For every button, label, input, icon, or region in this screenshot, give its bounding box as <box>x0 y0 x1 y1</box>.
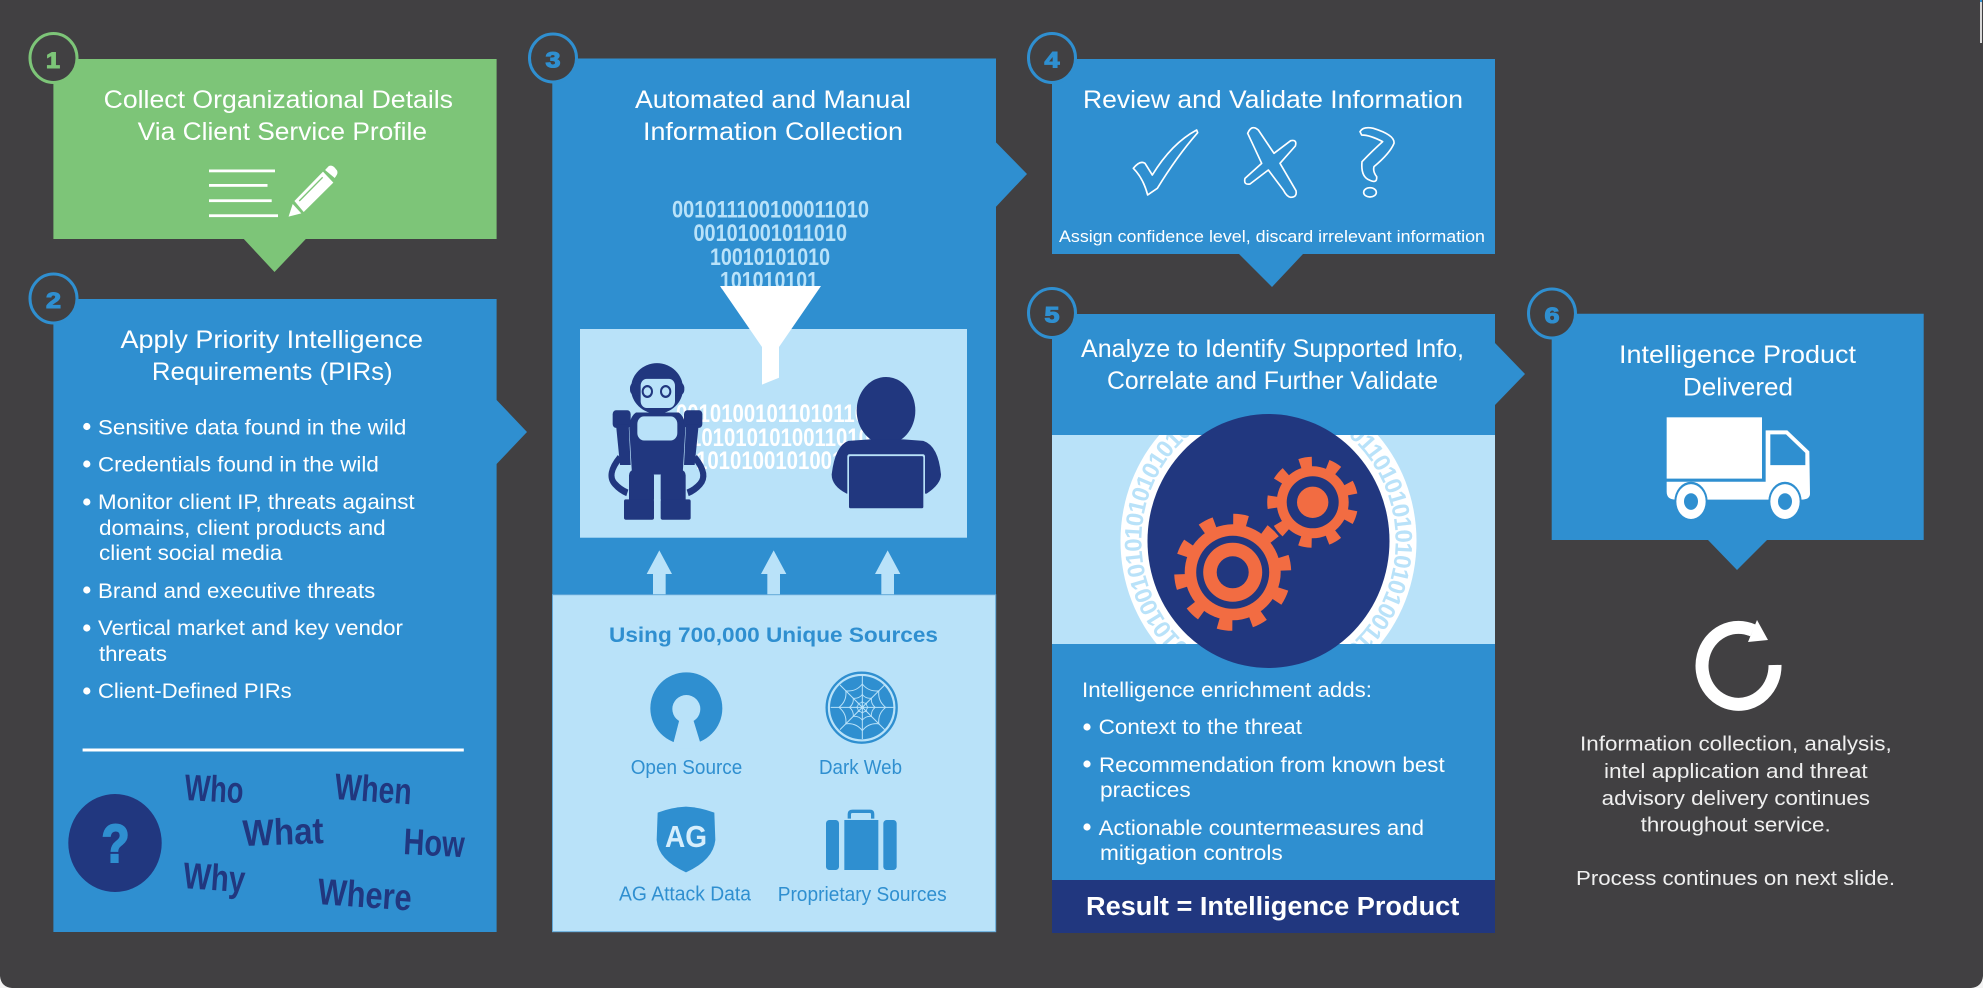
question words: Where <box>316 871 413 919</box>
panel: step 6 delivered <box>1528 289 1924 890</box>
panel 1 background with down arrow <box>53 59 497 272</box>
step 3 badge <box>530 34 576 82</box>
bullet list of PIRs <box>83 416 415 703</box>
enrichment list: Context to the threat <box>1099 716 1302 739</box>
arrows: data flowing up from sources <box>647 550 900 595</box>
incoming binary data: 10010101010 <box>710 244 830 271</box>
heading <box>635 86 911 146</box>
heading: Information Collection <box>643 118 903 146</box>
heading: Analyze to Identify Supported Info, <box>1081 335 1464 363</box>
filtered binary data <box>676 400 870 475</box>
incoming binary data: 001011100100011010 <box>672 196 869 223</box>
question words: What <box>242 810 324 854</box>
step 1 badge <box>30 34 77 82</box>
source: open source <box>631 672 742 779</box>
heading <box>1619 341 1856 402</box>
icon: question mark circle <box>68 794 162 892</box>
source: AG attack data <box>619 807 752 906</box>
source: AG attack data: AG <box>665 819 707 854</box>
heading: Apply Priority Intelligence <box>120 326 423 354</box>
icon: question mark circle: ? <box>102 814 130 874</box>
step 6 badge <box>1528 289 1576 338</box>
bullet list of PIRs: domains, client products and <box>99 517 386 540</box>
bullet list of PIRs: Monitor client IP, threats against <box>98 491 415 514</box>
panel: step 5 analyze <box>1027 287 1525 933</box>
sources section background <box>552 595 996 932</box>
source: open source: Open Source <box>631 757 742 779</box>
result bar <box>1052 880 1495 933</box>
icon: gears on navy circle <box>1148 414 1390 668</box>
sources heading: Using 700,000 Unique Sources <box>609 623 938 647</box>
icon: funnel <box>720 286 821 385</box>
continuation note: Process continues on next slide. <box>1576 867 1895 890</box>
bullet list of PIRs: Brand and executive threats <box>98 580 375 603</box>
bullet list of PIRs: Vertical market and key vendor <box>98 617 403 640</box>
heading: Correlate and Further Validate <box>1107 367 1438 395</box>
continuation note: advisory delivery continues <box>1602 787 1870 810</box>
step 5 badge: 5 <box>1044 302 1060 328</box>
step 4 badge: 4 <box>1044 48 1060 72</box>
icons: check, cross, question <box>1133 128 1394 197</box>
panel 3 blue background with right arrow <box>552 58 1027 595</box>
bullet list of PIRs: Sensitive data found in the wild <box>98 416 406 439</box>
source: dark web <box>819 673 902 779</box>
step 1 badge: 1 <box>46 48 60 73</box>
source: proprietary sources: Proprietary Sources <box>778 884 947 906</box>
step 4 badge <box>1028 34 1076 82</box>
incoming binary data: 101010101 <box>720 268 818 295</box>
continuation note: Information collection, analysis, <box>1580 733 1892 756</box>
enrichment list: Recommendation from known best <box>1099 754 1445 777</box>
step 6 badge: 6 <box>1544 303 1560 328</box>
heading: Collect Organizational Details <box>104 86 453 114</box>
icon: delivery truck <box>1667 417 1810 521</box>
question words: Why <box>182 855 247 900</box>
incoming binary data: 00101001011010 <box>694 220 847 247</box>
enrichment list: practices <box>1100 779 1191 802</box>
icon: document lines and pencil <box>209 166 337 217</box>
heading <box>120 326 423 386</box>
bullet list of PIRs: Client-Defined PIRs <box>98 680 292 703</box>
panel 5 background with right arrow <box>1052 314 1525 933</box>
enrichment list: Actionable countermeasures and <box>1099 817 1424 840</box>
heading: Requirements (PIRs) <box>152 358 393 386</box>
incoming binary data <box>672 196 869 295</box>
heading <box>104 86 453 146</box>
enrichment list: Intelligence enrichment adds: <box>1082 679 1372 702</box>
step 3 badge: 3 <box>546 48 560 72</box>
step 2 badge <box>30 274 77 323</box>
enrichment list <box>1082 679 1445 865</box>
continuation note <box>1576 733 1895 890</box>
bullet list of PIRs: client social media <box>99 542 283 565</box>
continuation note: throughout service. <box>1641 814 1831 837</box>
question words <box>182 766 466 919</box>
source: proprietary sources <box>778 811 947 906</box>
panel: step 2 priority intelligence requirements <box>30 274 527 932</box>
panel: step 3 automated and manual collection <box>530 34 1027 932</box>
icon: robot <box>611 363 703 520</box>
heading <box>1081 335 1464 395</box>
caption: Assign confidence level, discard irrelevant information <box>1059 227 1485 246</box>
step 2 badge: 2 <box>46 288 61 313</box>
question words: Who <box>184 767 245 811</box>
filtered binary data: 101010010100101 <box>696 447 866 475</box>
icon: refresh cycle <box>1702 620 1775 704</box>
bullet list of PIRs: Credentials found in the wild <box>98 454 379 477</box>
question words: How <box>403 821 466 865</box>
question words: When <box>333 766 413 812</box>
result bar: Result = Intelligence Product <box>1086 893 1460 921</box>
binary ring <box>1120 435 1416 644</box>
panel 6 background with down arrow <box>1552 314 1924 570</box>
panel 4 background with down arrow <box>1052 59 1495 287</box>
heading: Delivered <box>1683 374 1793 402</box>
light band <box>1052 435 1495 644</box>
enrichment list: mitigation controls <box>1100 842 1283 865</box>
filtered binary data: 1010101010011010 <box>690 424 870 452</box>
filtered binary data: 00101001011010110 <box>676 400 866 428</box>
bullet list of PIRs: threats <box>99 643 167 666</box>
panel: step 4 review and validate <box>1028 34 1495 287</box>
heading: Via Client Service Profile <box>138 118 427 146</box>
source: dark web: Dark Web <box>819 757 902 779</box>
panel 2 background with right arrow <box>53 299 527 932</box>
continuation note: intel application and threat <box>1604 760 1868 783</box>
panel: step 1 collect organizational details <box>30 34 497 272</box>
heading: Review and Validate Information <box>1083 86 1463 114</box>
heading: Intelligence Product <box>1619 341 1856 369</box>
step 5 badge <box>1028 288 1076 338</box>
source: AG attack data: AG Attack Data <box>619 884 752 906</box>
light analysis box <box>580 329 967 538</box>
icon: analyst at laptop <box>832 377 941 510</box>
heading: Automated and Manual <box>635 86 911 114</box>
